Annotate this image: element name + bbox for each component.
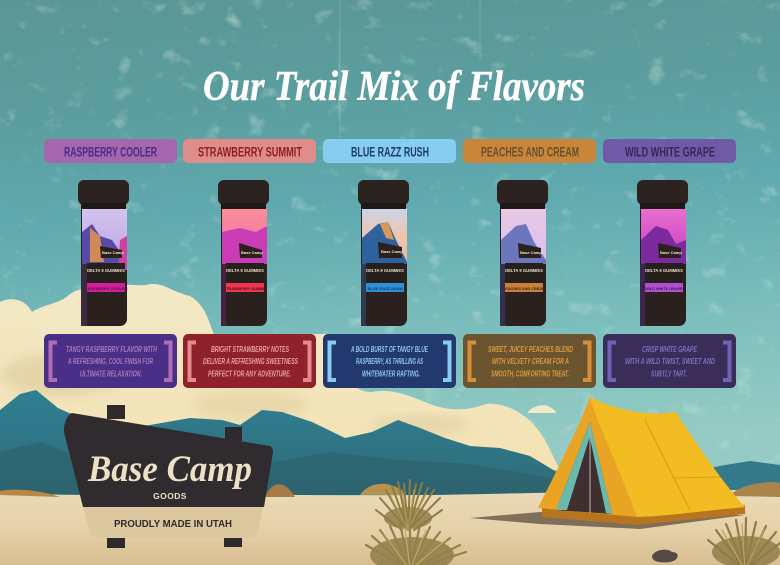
grass tuft: right xyxy=(708,518,780,565)
goods text: GOODS xyxy=(153,491,187,501)
flavor label: raspberry cooler xyxy=(44,139,177,163)
sign lower panel xyxy=(83,507,263,538)
description: raspberry cooler xyxy=(44,334,177,388)
tent door xyxy=(556,422,612,514)
bottle: raspberry cooler xyxy=(78,180,129,326)
flavor label: peaches and cream xyxy=(463,139,596,163)
background: clouds xyxy=(0,284,560,470)
sign posts xyxy=(107,405,242,548)
description: wild white grape: SUBTLY TART. xyxy=(651,370,687,378)
description: wild white grape xyxy=(603,334,736,388)
grass tuft: middle xyxy=(376,480,442,530)
brand name: Base Camp xyxy=(87,449,252,490)
bottle: peaches and cream: Base Camp xyxy=(520,250,542,255)
bottle: peaches and cream: DELTA 9 GUMMIES xyxy=(505,268,543,273)
sign board xyxy=(64,413,273,507)
bottle: wild white grape: WILD WHITE GRAPE xyxy=(645,287,683,291)
bottle: strawberry summit xyxy=(218,180,269,326)
background: desert ground xyxy=(0,480,780,565)
flavor label: strawberry summit xyxy=(183,139,316,163)
bottle: blue razz rush: BLUE RAZZ RUSH xyxy=(367,286,403,291)
tagline: PROUDLY MADE IN UTAH xyxy=(114,519,232,530)
description: blue razz rush: WHITEWATER RAFTING. xyxy=(362,370,420,378)
bottle: blue razz rush: DELTA 9 GUMMIES xyxy=(366,268,404,273)
logo sign xyxy=(64,405,273,548)
bottle: blue razz rush xyxy=(358,180,409,326)
description: peaches and cream xyxy=(463,334,596,388)
description: peaches and cream: WITH VELVETY CREAM FOR A xyxy=(492,357,569,366)
bottle: wild white grape xyxy=(637,180,688,326)
flavor label: strawberry summit: STRAWBERRY SUMMIT xyxy=(198,144,303,160)
description: blue razz rush: RASPBERRY, AS THRILLING AS xyxy=(356,357,423,366)
flavor label: peaches and cream: PEACHES AND CREAM xyxy=(481,144,579,160)
bottle: raspberry cooler: DELTA 9 GUMMIES xyxy=(87,268,125,273)
bottle: raspberry cooler: RASPBERRY COOLER xyxy=(84,286,128,291)
description: raspberry cooler: A REFRESHING, COOL FINISH FOR xyxy=(67,357,153,366)
description: strawberry summit: DELIVER A REFRESHING SWEETNESS xyxy=(203,357,298,366)
grass tuft: lower xyxy=(366,522,466,565)
flavor label: wild white grape xyxy=(603,139,736,163)
description: raspberry cooler: ULTIMATE RELAXATION. xyxy=(80,370,142,378)
bottle: wild white grape: Base Camp xyxy=(660,250,682,255)
description: strawberry summit xyxy=(183,334,316,388)
description: strawberry summit: BRIGHT STRAWBERRY NOTES xyxy=(211,345,289,354)
description: peaches and cream: SMOOTH, COMFORTING TREAT. xyxy=(491,370,569,378)
description: raspberry cooler: TANGY RASPBERRY FLAVOR WITH xyxy=(66,345,157,354)
flavor label: blue razz rush: BLUE RAZZ RUSH xyxy=(351,144,429,160)
description: blue razz rush: A BOLD BURST OF TANGY BLUE xyxy=(350,345,428,354)
bottle: strawberry summit: STRAWBERRY SUMMIT xyxy=(224,287,267,291)
description: peaches and cream: SWEET, JUICEY PEACHES BLEND xyxy=(488,345,573,354)
description: wild white grape: WITH A WILD TWIST, SWEET AND xyxy=(625,357,715,366)
bottle: strawberry summit: DELTA 9 GUMMIES xyxy=(226,268,264,273)
flavor label: wild white grape: WILD WHITE GRAPE xyxy=(625,144,715,160)
description: blue razz rush xyxy=(323,334,456,388)
description: strawberry summit: PERFECT FOR ANY ADVENTURE. xyxy=(208,370,291,378)
description: wild white grape: CRISP WHITE GRAPE xyxy=(642,345,697,354)
bottle: raspberry cooler: Base Camp xyxy=(102,250,124,255)
tent xyxy=(470,397,745,529)
flavor label: raspberry cooler: RASPBERRY COOLER xyxy=(64,144,157,160)
bottle: strawberry summit: Base Camp xyxy=(241,250,263,255)
title: Our Trail Mix of Flavors xyxy=(203,64,585,110)
bottle: peaches and cream: PEACHES AND CREAM xyxy=(503,287,545,291)
background: mountains xyxy=(0,390,780,495)
bottle: peaches and cream xyxy=(497,180,548,326)
flavor label: blue razz rush xyxy=(323,139,456,163)
bottle: wild white grape: DELTA 9 GUMMIES xyxy=(645,268,683,273)
bottle: blue razz rush: Base Camp xyxy=(381,249,403,254)
